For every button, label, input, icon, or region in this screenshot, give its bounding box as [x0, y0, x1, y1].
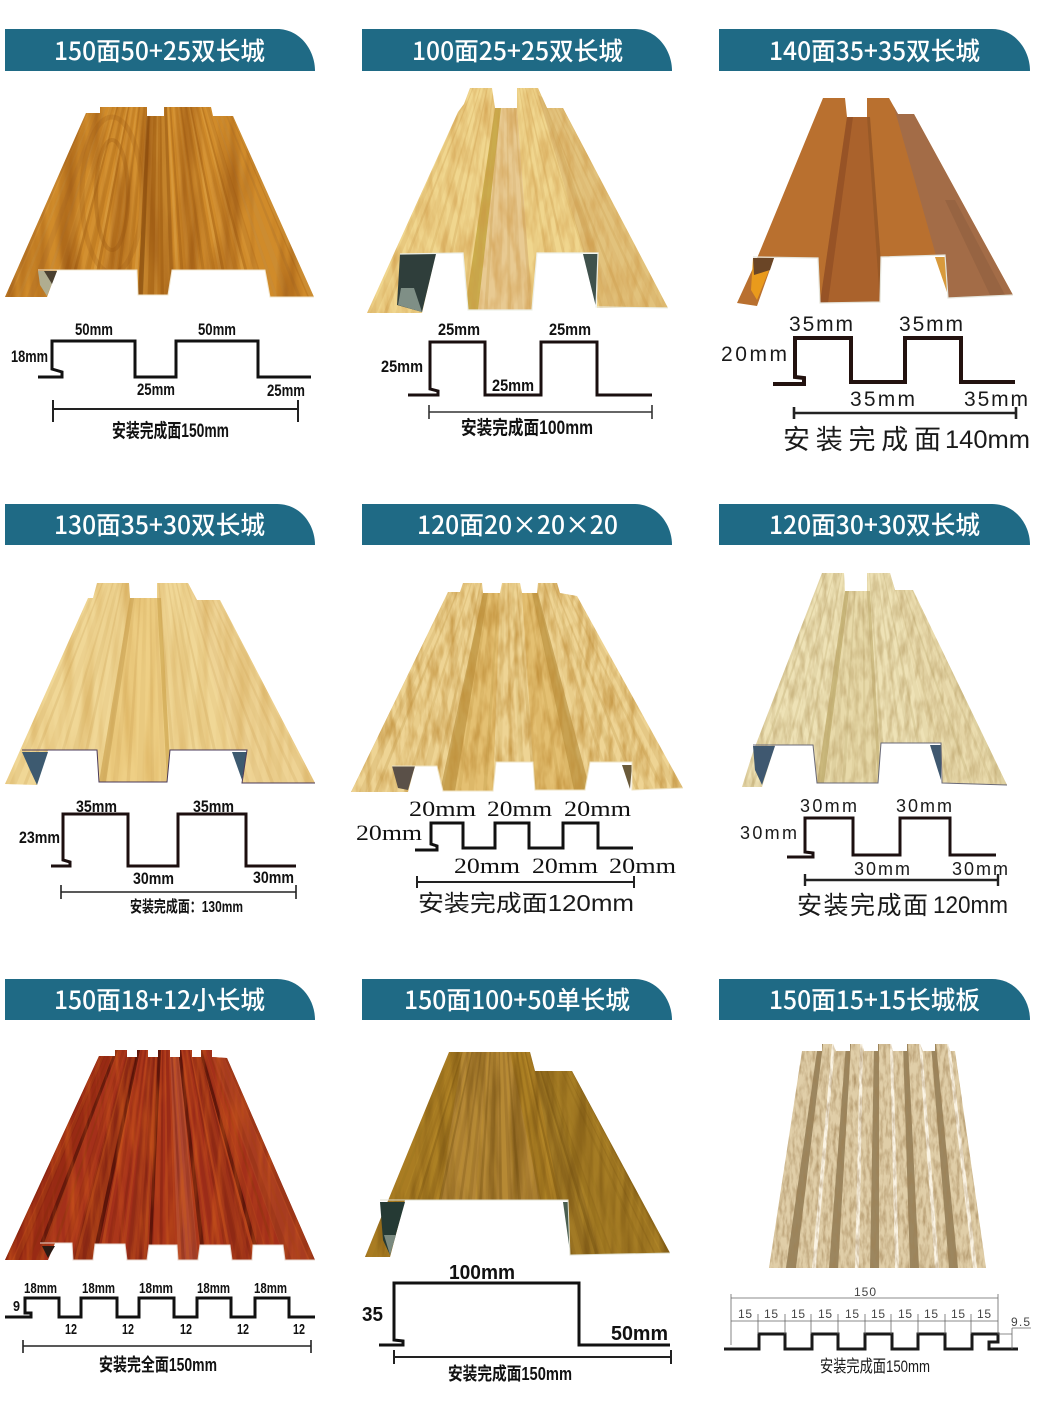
dimension labels: 20mm — [356, 820, 422, 845]
dimension labels: 35mm — [789, 313, 853, 336]
heading bar — [719, 979, 1030, 1020]
dimension labels: 15 — [977, 1307, 991, 1321]
dimension labels: 30mm — [800, 796, 857, 816]
cross-section profile — [5, 1298, 315, 1317]
dimension labels: 35 — [362, 1304, 383, 1326]
panel: 140面35+35双长城 — [719, 29, 1030, 455]
cross-section profile — [415, 823, 633, 850]
panel photo: pale oak — [742, 573, 1007, 787]
dimension labels: 25mm — [381, 357, 423, 376]
dimension line — [23, 1340, 311, 1353]
panel photo: amber wood grain — [5, 107, 314, 298]
heading bar: 130面35+30双长城 — [54, 506, 265, 542]
dimension labels: 35mm — [964, 388, 1028, 411]
panel photo: oak with three ribs — [351, 583, 683, 792]
dimension labels: 15 — [818, 1307, 832, 1321]
dimension labels: 35mm — [76, 797, 117, 816]
dimension labels — [381, 320, 593, 439]
dimension labels: 20mm — [454, 853, 520, 878]
dimension labels: 18mm — [254, 1280, 287, 1297]
cross-section profile — [724, 1334, 1018, 1349]
dimension labels: 120mm — [933, 892, 1008, 919]
dimension labels — [13, 1280, 305, 1375]
dimension labels: 35mm — [193, 797, 234, 816]
cross-section profile — [38, 341, 311, 377]
dimension labels: 30mm — [896, 796, 952, 816]
panel: 150面18+12小长城 — [5, 979, 315, 1373]
dimension labels — [11, 320, 305, 442]
dimension labels: 25mm — [137, 380, 175, 399]
dimension labels: 25mm — [492, 376, 534, 395]
dimension labels: 15 — [898, 1307, 912, 1321]
dimension labels: 18mm — [11, 347, 48, 366]
heading bar — [362, 29, 672, 71]
dimension labels: 30mm — [740, 823, 797, 843]
dimension line — [794, 407, 1016, 419]
heading bar: 150面15+15长城板 — [769, 981, 980, 1017]
panel: 120面20×20×20 — [351, 504, 683, 914]
dimension labels: 15 — [871, 1307, 885, 1321]
heading bar — [5, 504, 315, 545]
dimension labels: 35mm — [850, 388, 915, 411]
dimension labels: 150 — [854, 1285, 876, 1299]
dimension labels: 12 — [293, 1321, 305, 1338]
dimension labels: 12 — [180, 1321, 192, 1338]
cross-section profile — [773, 338, 1015, 384]
dimension labels — [19, 797, 294, 916]
dimension labels: 20mm — [721, 343, 787, 366]
dimension labels: 35mm — [899, 313, 963, 336]
dimension labels: 18mm — [24, 1280, 57, 1297]
heading bar: 150面18+12小长城 — [54, 981, 265, 1017]
cross-section profile — [51, 814, 296, 866]
dimension labels: 15 — [764, 1307, 778, 1321]
dimension labels: 18mm — [82, 1280, 115, 1297]
heading bar: 150面50+25双长城 — [54, 32, 265, 68]
dimension labels: 安装完成面150mm — [448, 1363, 572, 1384]
dimension labels: 50mm — [75, 320, 113, 339]
dimension labels: 15 — [951, 1307, 965, 1321]
panel: 150面15+15长城板 — [719, 979, 1031, 1376]
panel photo: brown plain — [737, 98, 1013, 306]
dimension labels — [356, 796, 676, 916]
dimension labels: 安装完成面120mm — [418, 890, 634, 916]
dimension labels: 30mm — [133, 869, 174, 888]
dimension line — [61, 885, 296, 899]
dimension labels: 安装完成面 — [797, 892, 928, 920]
panel photo: pale yellow wood — [5, 583, 315, 785]
panel: 150面50+25双长城 — [5, 29, 315, 440]
dimension labels: 15 — [924, 1307, 938, 1321]
dimension line — [53, 400, 298, 422]
dimension labels: 9 — [13, 1298, 20, 1315]
dimension labels: 12 — [65, 1321, 77, 1338]
dimension labels: 30mm — [952, 859, 1008, 879]
dimension labels: 140mm — [945, 426, 1030, 454]
heading bar — [719, 504, 1030, 545]
dimension labels: 20mm — [532, 853, 598, 878]
panel photo: red wood five ribs — [5, 1050, 315, 1260]
dimension labels: 100mm — [449, 1262, 515, 1284]
dimension labels: 15 — [845, 1307, 859, 1321]
heading bar: 140面35+35双长城 — [769, 32, 980, 68]
heading bar — [362, 979, 672, 1020]
dimension labels: 30mm — [854, 859, 910, 879]
panel photo: dark gold wood — [365, 1052, 670, 1257]
dimension labels: 12 — [122, 1321, 134, 1338]
dimension labels: 安装完成面：130mm — [130, 897, 243, 916]
panel photo: beige textured — [769, 1044, 986, 1268]
panel: 150面100+50单长城 — [362, 979, 672, 1382]
cross-section profile — [408, 342, 652, 395]
panel photo: light oak — [367, 88, 668, 313]
dimension labels: 20mm — [409, 796, 476, 821]
heading bar — [5, 979, 315, 1020]
dimension labels — [740, 796, 1008, 920]
dimension labels: 30mm — [253, 868, 294, 887]
panel: 130面35+30双长城 — [5, 504, 315, 914]
cross-section profile — [787, 818, 996, 857]
dimension labels: 安装完成面100mm — [461, 416, 593, 439]
dimension labels — [721, 313, 1030, 455]
dimension labels: 15 — [791, 1307, 805, 1321]
dimension labels: 20mm — [609, 853, 676, 878]
dimension labels: 18mm — [197, 1280, 230, 1297]
heading bar: 100面25+25双长城 — [412, 32, 623, 68]
dimension labels: 安装完成面150mm — [112, 419, 229, 442]
heading bar: 120面20×20×20 — [417, 506, 618, 542]
dimension labels: 23mm — [19, 828, 60, 847]
dimension line — [394, 1350, 671, 1364]
dimension labels: 25mm — [549, 320, 591, 339]
panel: 100面25+25双长城 — [362, 29, 672, 436]
dimension labels: 50mm — [198, 320, 236, 339]
dimension labels: 20mm — [487, 796, 552, 821]
panel: 120面30+30双长城 — [719, 504, 1030, 916]
dimension labels: 50mm — [611, 1323, 668, 1345]
dimension labels: 安装完全面150mm — [99, 1354, 217, 1375]
dimension lines — [731, 1294, 1031, 1349]
heading bar: 120面30+30双长城 — [769, 506, 980, 542]
cross-section profile — [379, 1283, 670, 1345]
dimension labels: 9.5 — [1011, 1315, 1030, 1329]
heading bar: 150面100+50单长城 — [404, 981, 630, 1017]
dimension labels: 20mm — [564, 796, 631, 821]
dimension labels: 15 — [738, 1307, 752, 1321]
dimension labels — [362, 1262, 668, 1384]
dimension labels — [738, 1285, 1030, 1376]
dimension line — [429, 405, 652, 419]
dimension line — [805, 874, 998, 886]
dimension labels: 安装完成面 — [783, 425, 941, 455]
dimension labels: 25mm — [267, 381, 305, 400]
heading bar — [362, 504, 672, 545]
dimension labels: 12 — [237, 1321, 249, 1338]
heading bar — [719, 29, 1030, 71]
dimension labels: 25mm — [438, 320, 480, 339]
heading bar — [5, 29, 315, 71]
dimension line — [417, 876, 634, 888]
dimension labels: 安装完成面150mm — [820, 1357, 930, 1376]
dimension labels: 18mm — [139, 1280, 173, 1297]
